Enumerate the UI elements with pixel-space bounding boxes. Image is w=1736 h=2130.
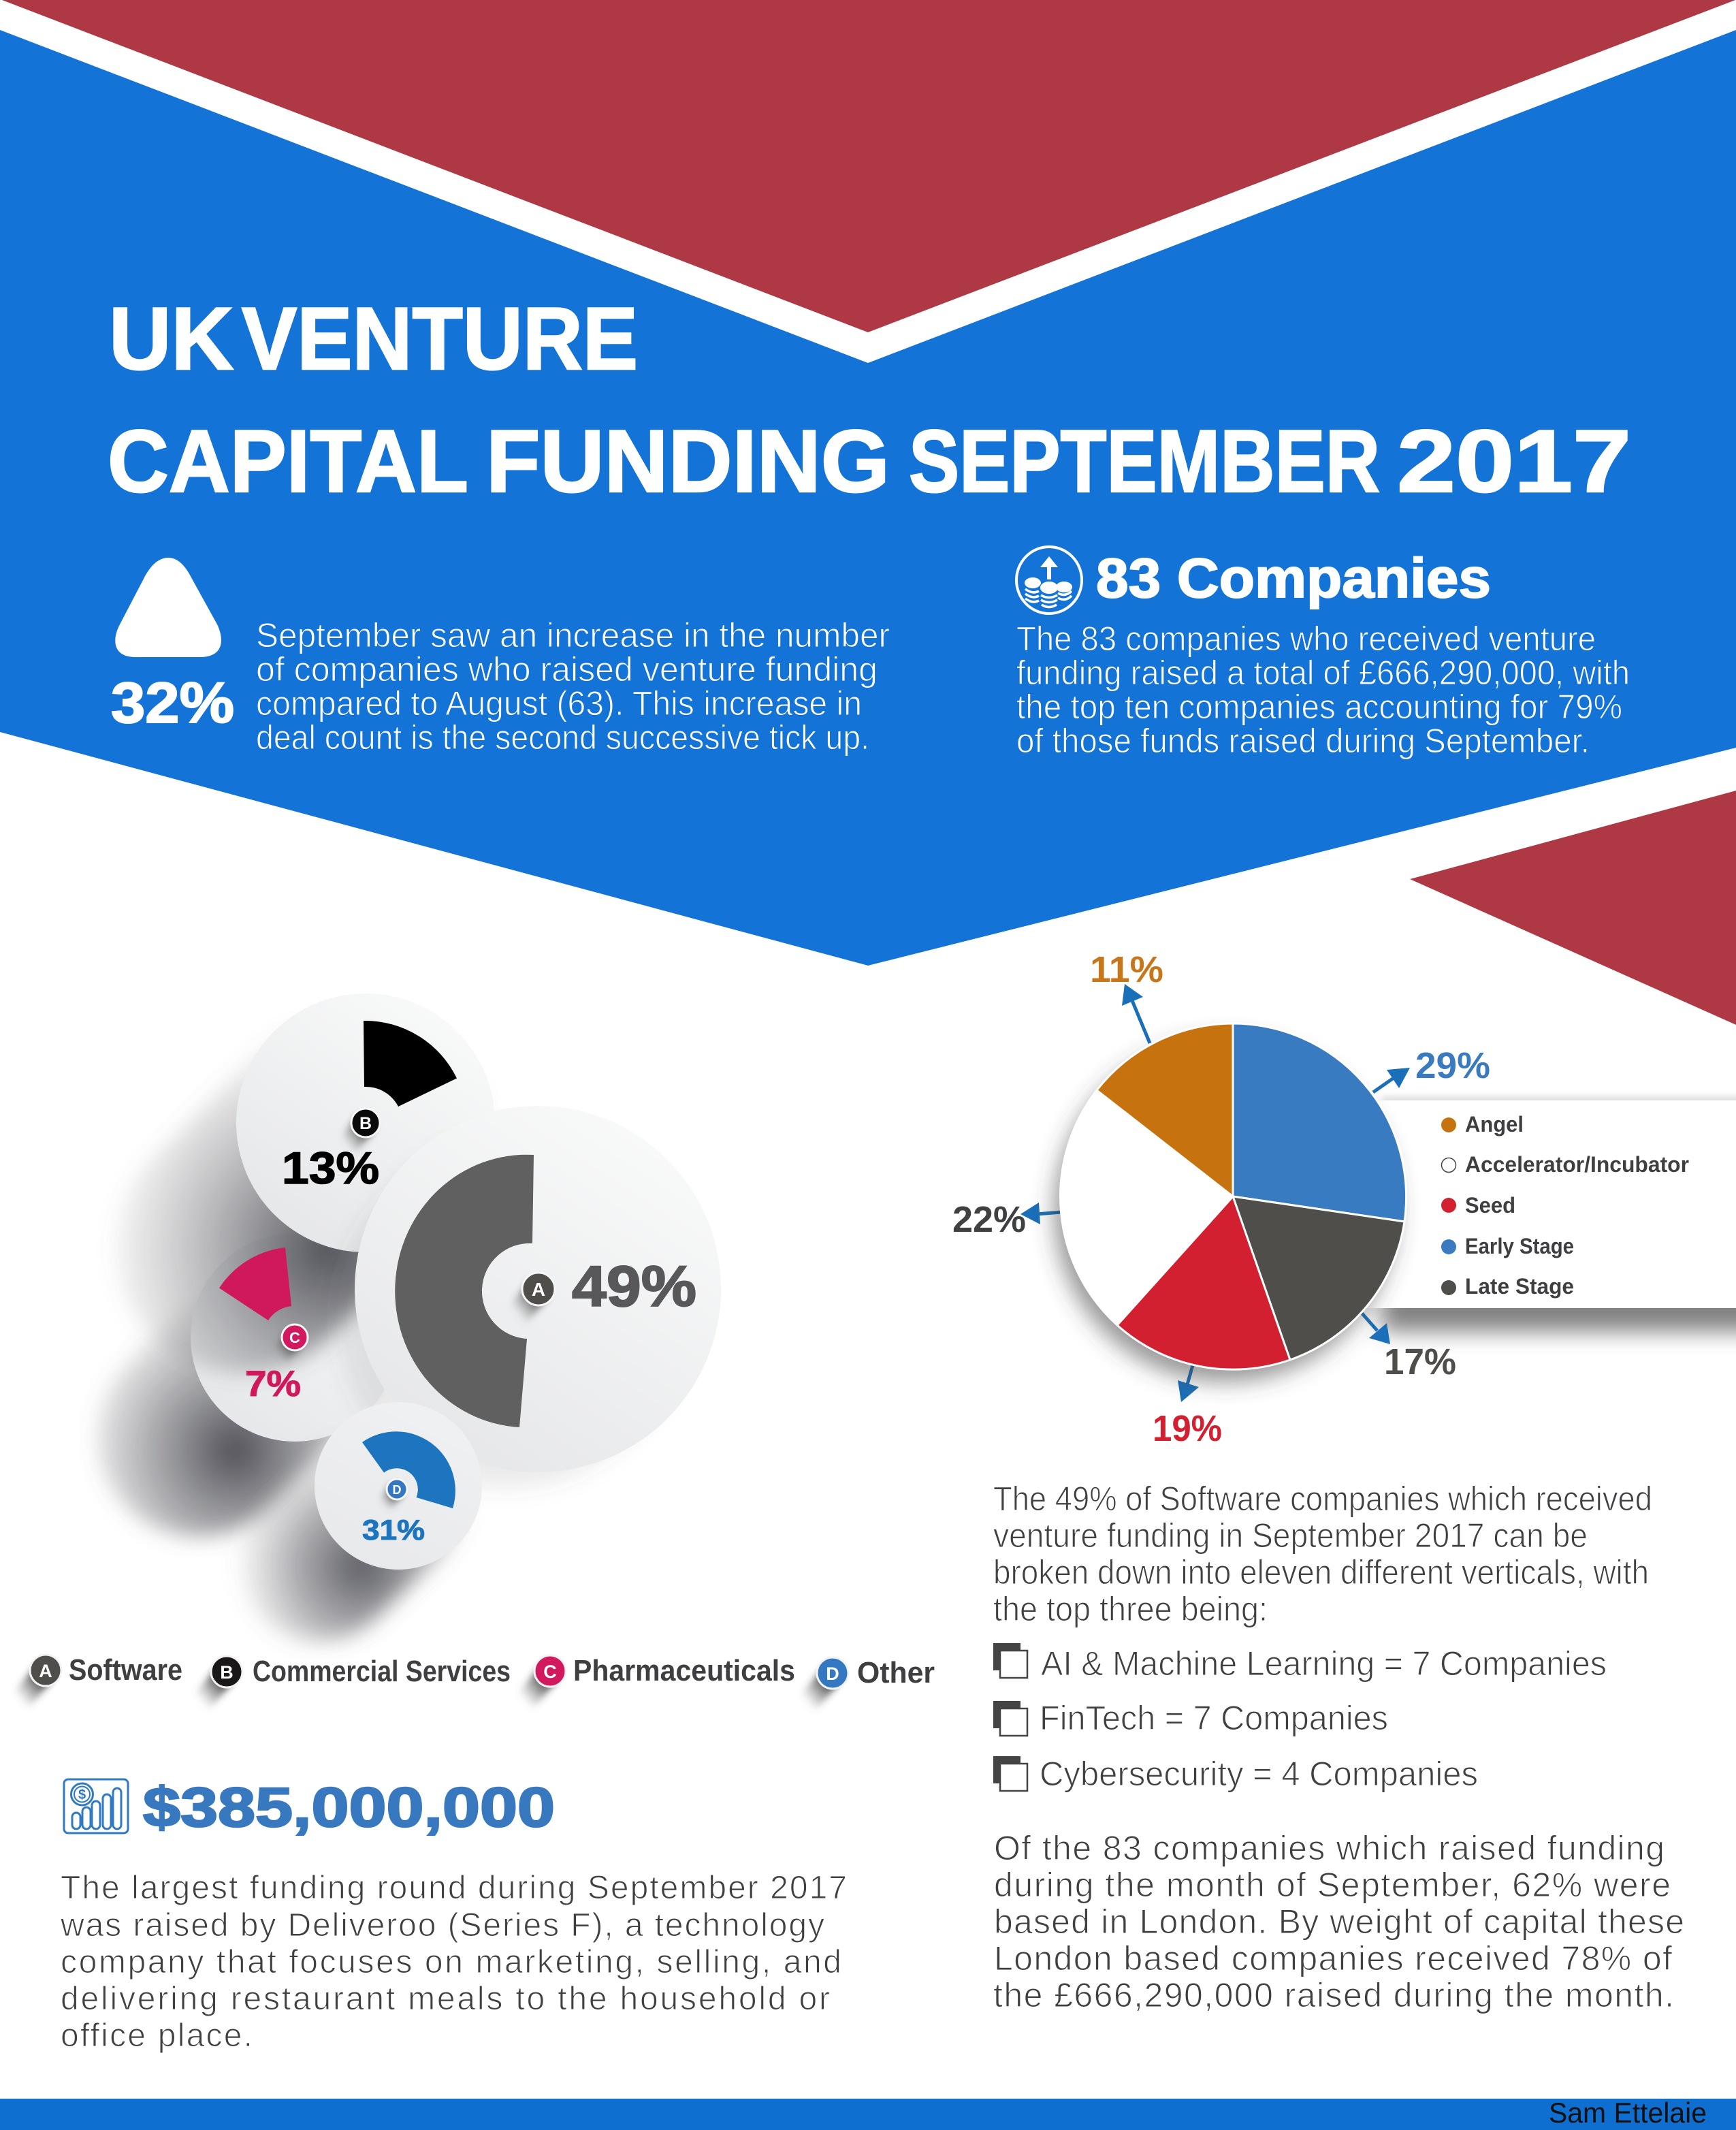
- icon: dollar bar chart: [64, 1779, 128, 1833]
- title: CAPITAL: [108, 411, 468, 511]
- title: [108, 289, 1631, 511]
- wedge C: [219, 1247, 291, 1320]
- text block: largest funding round: [60, 1870, 847, 2054]
- arrow: 11%: [1122, 984, 1150, 1043]
- badge A: A: [532, 1279, 545, 1300]
- list item: AI and Machine Learning: AI & Machine Learning = 7 Companies: [1041, 1644, 1607, 1683]
- legend item: Other: D: [826, 1664, 839, 1684]
- legend item: Software: [20, 1653, 182, 1701]
- list item: FinTech: FinTech = 7 Companies: [1040, 1699, 1388, 1737]
- slice: Early Stage: [1233, 1023, 1407, 1222]
- legend item: Pharmaceuticals: C: [543, 1662, 557, 1682]
- heading: $385,000,000: $385,000,000: [143, 1777, 555, 1839]
- icon: coins with up arrow: [1016, 547, 1082, 614]
- icon: dollar bar chart: $: [78, 1787, 86, 1802]
- text block: largest funding round: delivering restaurant meals to the household or: [61, 1981, 830, 2017]
- heading: 83 Companies: 83 Companies: [1096, 547, 1491, 609]
- text block: total raised: funding raised a total of £666,290,000, with: [1016, 654, 1630, 692]
- legend item: Late Stage: Late Stage: [1465, 1274, 1574, 1299]
- legend item: Angel: [1441, 1112, 1524, 1136]
- legend panel shadow: [1382, 1096, 1736, 1331]
- legend item: Other: [807, 1656, 935, 1704]
- legend item: Other: Other: [857, 1656, 935, 1689]
- legend item: Early Stage: Early Stage: [1465, 1234, 1574, 1258]
- badge D: [384, 1479, 407, 1506]
- header blue chevron panel: [0, 30, 1736, 966]
- legend item: Seed: Seed: [1465, 1193, 1515, 1218]
- footer credit: Sam Ettelaie: [1549, 2097, 1707, 2129]
- text block: deal count increase: deal count is the second successive tick up.: [256, 718, 869, 757]
- stat: 32%: 32%: [111, 671, 234, 735]
- text block: London share: London based companies received 78% of: [994, 1939, 1672, 1977]
- text block: London share: the £666,290,000 raised during the month.: [993, 1976, 1674, 2014]
- footer bar: [0, 2099, 1736, 2130]
- legend item: Software: A: [39, 1661, 52, 1681]
- text block: software verticals: The 49% of Software companies which received: [993, 1480, 1652, 1518]
- label 13%: 13%: [282, 1143, 379, 1193]
- arrow: 17%: [1362, 1313, 1390, 1344]
- slice: Seed: [1117, 1196, 1290, 1369]
- arrow: 22%: [1020, 1203, 1062, 1224]
- label 49%: 49%: [572, 1254, 696, 1318]
- wedge D: [362, 1431, 455, 1508]
- text block: London share: based in London. By weight of capital these: [994, 1903, 1684, 1941]
- legend item: Angel: Angel: [1465, 1112, 1524, 1136]
- legend item: Pharmaceuticals: [525, 1654, 795, 1702]
- label 29%: 29%: [1415, 1045, 1490, 1086]
- slice: Accelerator: [1060, 1090, 1233, 1325]
- text block: total raised: [1016, 620, 1630, 760]
- disc B: [236, 994, 495, 1252]
- legend item: Commercial Services: B: [220, 1662, 234, 1683]
- shadow: disc D: [319, 1495, 388, 1561]
- text block: software verticals: venture funding in September 2017 can be: [993, 1516, 1588, 1555]
- badge B: B: [359, 1114, 372, 1133]
- text block: software verticals: [993, 1480, 1652, 1628]
- text block: largest funding round: office place.: [61, 2018, 253, 2054]
- arrow: 19%: [1178, 1365, 1199, 1402]
- text block: total raised: the top ten companies accounting for 79%: [1016, 688, 1622, 726]
- badge D: D: [392, 1483, 402, 1497]
- wedge A: [395, 1155, 534, 1427]
- legend item: Commercial Services: Commercial Services: [253, 1655, 511, 1688]
- text block: largest funding round: company that focuses on marketing, selling, and: [61, 1944, 841, 1980]
- text block: deal count increase: compared to August (63). This increase in: [256, 684, 862, 722]
- text block: deal count increase: [256, 616, 890, 757]
- shadow: disc A: [507, 1302, 524, 1318]
- icon: rounded triangle up: [115, 558, 221, 657]
- arrow: 29%: [1373, 1068, 1410, 1092]
- badge B: [347, 1109, 380, 1147]
- chart: sector discs: [191, 994, 721, 1570]
- slice: Late Stage: [1233, 1196, 1404, 1360]
- legend item: Accelerator/Incubator: Accelerator/Incubator: [1465, 1152, 1689, 1177]
- label 31%: 31%: [362, 1514, 425, 1546]
- text block: London share: during the month of September, 62% were: [994, 1866, 1671, 1904]
- text block: largest funding round: The largest funding round during September 2017: [61, 1870, 847, 1906]
- text block: largest funding round: was raised by Deliveroo (Series F), a technology: [60, 1907, 824, 1943]
- right red triangle: [1410, 791, 1736, 1025]
- text block: London share: Of the 83 companies which raised funding: [994, 1829, 1665, 1867]
- title: UK: [109, 289, 234, 388]
- label 22%: 22%: [952, 1199, 1026, 1240]
- label 19%: 19%: [1153, 1408, 1222, 1449]
- pie chart: [1060, 1023, 1407, 1369]
- title: FUNDING: [486, 411, 890, 511]
- list item: Cybersecurity: Cybersecurity = 4 Companies: [1040, 1755, 1478, 1793]
- legend item: Pharmaceuticals: Pharmaceuticals: [573, 1654, 795, 1687]
- legend item: Software: Software: [69, 1653, 182, 1687]
- text block: software verticals: broken down into eleven different verticals, with: [993, 1553, 1649, 1591]
- disc A: [355, 1106, 721, 1472]
- text block: software verticals: the top three being:: [993, 1590, 1268, 1628]
- text block: London share: [993, 1829, 1684, 2014]
- badge C: [279, 1324, 308, 1357]
- wedge B: [364, 1021, 457, 1107]
- label 7%: 7%: [245, 1364, 301, 1404]
- label 17%: 17%: [1384, 1341, 1456, 1382]
- legend panel: funding stage: [1362, 1100, 1736, 1308]
- slice: Angel: [1097, 1023, 1233, 1196]
- disc C: [191, 1233, 399, 1442]
- text block: total raised: The 83 companies who received venture: [1016, 620, 1596, 658]
- disc D: [315, 1402, 482, 1570]
- text block: deal count increase: of companies who raised venture funding: [256, 650, 878, 688]
- shadow: disc C: [198, 1343, 289, 1436]
- text block: deal count increase: September saw an increase in the number: [256, 616, 890, 654]
- legend item: Seed: [1441, 1193, 1515, 1218]
- header red chevron: [2, 0, 1735, 332]
- legend item: Commercial Services: [202, 1655, 511, 1702]
- badge C: C: [289, 1329, 300, 1346]
- badge A: [517, 1273, 555, 1316]
- text block: total raised: of those funds raised during September.: [1016, 722, 1590, 760]
- title: SEPTEMBER: [909, 411, 1380, 511]
- label 11%: 11%: [1090, 949, 1163, 990]
- legend: sectors: [20, 1653, 935, 1704]
- title: 2017: [1397, 411, 1631, 511]
- pie shadow: [1054, 1039, 1397, 1382]
- title: VENTURE: [242, 289, 638, 388]
- shadow: disc B: [241, 1128, 360, 1247]
